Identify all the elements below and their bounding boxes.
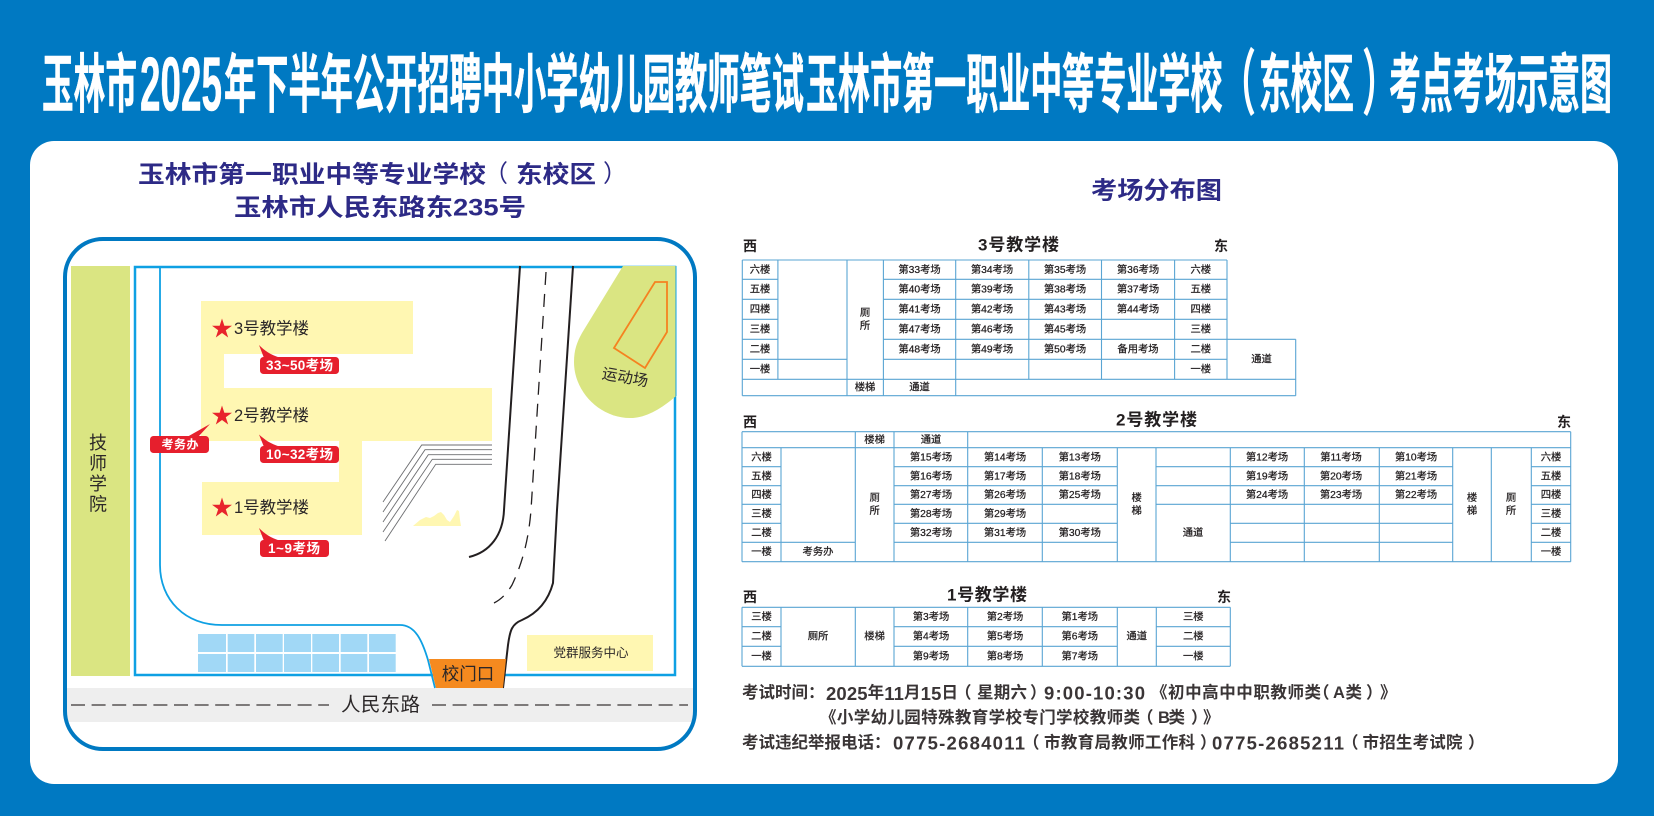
heading: school name and address: ）	[603, 160, 627, 188]
exam time line 2: 》	[1203, 708, 1220, 727]
building 3 labels: 三楼	[1191, 322, 1211, 335]
building 1 labels: 第5考场	[987, 630, 1023, 643]
building 3 labels: 六楼	[1191, 263, 1211, 276]
building 1 labels: 三楼	[751, 610, 772, 623]
building 2 labels: 四楼	[1541, 488, 1561, 501]
building 2 labels: 五楼	[1541, 469, 1561, 482]
heading: school name and address: 玉林市人民东路东235号	[234, 194, 526, 222]
report phones line: （	[1023, 733, 1040, 752]
exam time line 1	[742, 682, 1396, 704]
building 3 labels: 第42考场	[971, 302, 1013, 315]
building 3 labels: 第49考场	[971, 342, 1013, 355]
building 2 labels: 三楼	[1541, 507, 1561, 520]
building 3 labels: 所	[860, 320, 870, 332]
heading: exam room distribution: 考场分布图	[1091, 178, 1222, 204]
building 3 labels: 四楼	[750, 302, 770, 315]
table: building 1	[742, 584, 1231, 666]
report phones line: （	[1342, 733, 1358, 752]
building 3 labels: 一楼	[1191, 362, 1211, 375]
building 1 header: 西	[743, 589, 757, 605]
building 1 labels: 第6考场	[1061, 630, 1098, 643]
building 1 labels: 第1考场	[1061, 610, 1098, 623]
building 1 labels: 第3考场	[913, 610, 949, 623]
building 1 labels	[751, 610, 1204, 662]
panel: white content area	[30, 141, 1618, 784]
sports field: 运动场	[601, 365, 650, 390]
building 2 label: 2号教学楼	[234, 406, 309, 425]
building 2 labels: 第16考场	[910, 469, 952, 482]
building 3 labels: 通道	[909, 381, 930, 394]
campus inner road edge	[160, 267, 435, 688]
table: building 3	[742, 234, 1296, 396]
building: technician college: 院	[89, 494, 107, 514]
map frame	[65, 239, 695, 749]
building 3 labels: 第43考场	[1044, 302, 1086, 315]
building: technician college: 学	[89, 474, 107, 494]
exam time line 1: ）	[1366, 683, 1382, 702]
building 2 labels: 二楼	[1541, 526, 1561, 539]
building 3 labels: 二楼	[1191, 342, 1211, 355]
building 3 labels: 通道	[1251, 352, 1272, 365]
building 1 labels: 第4考场	[913, 630, 949, 643]
heading: school name and address	[138, 160, 627, 222]
building 2 labels: 第10考场	[1395, 450, 1437, 463]
building 3 labels: 第41考场	[898, 302, 941, 315]
exam time line 1: ）	[1030, 683, 1046, 702]
building 1 labels: 三楼	[1183, 610, 1204, 623]
building 3 labels: 二楼	[750, 342, 770, 355]
building 3 header: 东	[1214, 238, 1228, 254]
title: 玉林市第一职业中等专业学校	[806, 49, 1222, 121]
building 2 labels: 通道	[1183, 526, 1203, 539]
exam time line 1: （	[1313, 683, 1330, 702]
title: 2025	[140, 42, 222, 128]
text block: exam time and report phones	[742, 682, 1484, 754]
exam time line 2: （	[1137, 708, 1154, 727]
exam time line 1: （	[955, 683, 972, 702]
building 2 labels: 第15考场	[910, 450, 952, 463]
building 2 labels: 第24考场	[1246, 488, 1288, 501]
building 2 labels: 第20考场	[1320, 469, 1362, 482]
building 2 labels: 第13考场	[1059, 450, 1101, 463]
building 2 labels: 所	[1506, 505, 1516, 517]
party service centre	[527, 635, 653, 671]
building 2 labels: 楼	[1131, 491, 1142, 504]
building 2 labels: 所	[869, 505, 880, 517]
building 1 labels: 第2考场	[987, 610, 1023, 623]
heading: school name and address: 玉林市第一职业中等专业学校	[138, 162, 486, 188]
report phones line: 市教育局教师工作科	[1044, 732, 1196, 752]
building 3 labels: 备用考场	[1117, 342, 1159, 355]
hatched pavement lines	[383, 445, 492, 541]
title	[42, 42, 1612, 128]
building 2 labels: 第30考场	[1059, 526, 1101, 539]
report phones line: 0775-2685211	[1212, 732, 1344, 754]
building 2 labels: 第14考场	[984, 450, 1026, 463]
heading: school name and address: （	[484, 160, 508, 188]
building 2 labels: 第17考场	[984, 469, 1026, 482]
callout: exam office: 考务办	[162, 436, 198, 452]
building 2 labels: 第32考场	[910, 526, 952, 539]
callout: rooms 1-9	[259, 528, 329, 557]
building 1 header: 东	[1217, 589, 1231, 605]
school gate	[429, 659, 506, 688]
exam time line 1: 9:00-10:30	[1044, 682, 1145, 704]
exam time line 1: A类	[1333, 683, 1362, 702]
building 2 labels: 考务办	[803, 545, 833, 558]
heading: school name and address: 东校区	[516, 162, 596, 188]
building 3 labels: 第35考场	[1044, 263, 1086, 276]
title: 东校区	[1259, 49, 1354, 121]
report phones line: ）	[1468, 733, 1484, 752]
report phones line: 市招生考试院	[1362, 732, 1463, 752]
building 3 labels: 五楼	[1191, 282, 1211, 295]
building 3 labels: 第45考场	[1044, 322, 1086, 335]
building 3 labels: 第46考场	[971, 322, 1013, 335]
building 3 labels: 第34考场	[971, 263, 1013, 276]
building 2 labels: 梯	[1467, 504, 1477, 517]
building 3 labels: 第37考场	[1117, 282, 1159, 295]
title: 年下半年公开招聘中小学幼儿园教师笔试	[224, 49, 804, 121]
building: technician college: 技	[89, 433, 107, 453]
building 2 labels: 六楼	[1541, 450, 1561, 463]
building 3 labels: 第47考场	[898, 322, 941, 335]
panel: campus map	[65, 239, 695, 749]
building 2 labels: 第21考场	[1395, 469, 1437, 482]
campus boundary	[135, 267, 675, 675]
building 2 header: 2号教学楼	[1116, 410, 1197, 430]
building 2 labels: 五楼	[751, 469, 772, 482]
title: （	[1220, 45, 1256, 125]
building 3 labels	[750, 263, 1272, 394]
callout: rooms 33-50	[259, 345, 339, 374]
building 2 labels: 第18考场	[1059, 469, 1101, 482]
building 1 header	[743, 584, 1231, 605]
exam time line 1: 《初中高中中职教师类	[1151, 682, 1322, 702]
table: building 2	[742, 410, 1571, 562]
sports field	[574, 266, 676, 418]
building 1 header: 1号教学楼	[947, 584, 1027, 604]
building 2 labels: 六楼	[751, 450, 772, 463]
building 2 labels: 第23考场	[1320, 488, 1362, 501]
small yellow landscaping	[413, 510, 461, 526]
building 3 labels: 一楼	[750, 362, 770, 375]
building 2 labels: 通道	[921, 433, 941, 446]
building: teaching building footprints	[201, 301, 492, 535]
building 2 labels: 厕	[1506, 492, 1516, 504]
building 3 header	[743, 234, 1228, 254]
building 3 labels: 四楼	[1191, 302, 1211, 315]
building 2 labels: 四楼	[751, 488, 772, 501]
road: Renmin East Road band: 人民东路	[341, 694, 420, 716]
building 3 labels: 第38考场	[1044, 282, 1086, 295]
callout: rooms 10-32: 10~32考场	[266, 447, 333, 462]
callout: rooms 33-50: 33~50考场	[266, 358, 333, 373]
party service centre: 党群服务中心	[553, 645, 629, 660]
exam time line 1: 星期六	[977, 683, 1027, 702]
building 1 grid	[742, 607, 1230, 666]
building 2 labels: 厕	[869, 492, 880, 504]
building 3 labels: 厕	[860, 307, 870, 319]
road: Renmin East Road band	[67, 688, 693, 722]
building 2 labels: 二楼	[751, 526, 772, 539]
building 3 labels: 六楼	[750, 263, 770, 276]
building 2 labels: 楼梯	[864, 433, 885, 446]
building 3 header: 西	[743, 238, 757, 254]
report phones line: 考试违纪举报电话：	[742, 732, 890, 752]
building 2 labels: 楼	[1467, 491, 1477, 504]
callout: exam office	[150, 424, 210, 453]
exam time line 1: 2025年11月15日	[826, 682, 958, 704]
building 3 labels: 第36考场	[1117, 263, 1159, 276]
building 1 labels: 第9考场	[913, 649, 949, 662]
exam time line 2: 《小学幼儿园特殊教育学校专门学校教师类	[820, 707, 1140, 727]
building 2 header	[743, 410, 1571, 430]
school gate: 校门口	[442, 664, 494, 684]
building 1 labels: 一楼	[1183, 649, 1204, 662]
building 1 labels: 楼梯	[864, 630, 885, 643]
building 3 label: 3号教学楼	[234, 319, 309, 338]
title: ）	[1362, 45, 1398, 125]
report phones line	[742, 732, 1484, 754]
building 3 labels: 五楼	[750, 282, 770, 295]
campus main road	[469, 266, 573, 688]
building 1 labels: 第8考场	[987, 649, 1023, 662]
building 2 labels: 第28考场	[910, 507, 952, 520]
parking grid	[198, 634, 396, 672]
callout: rooms 1-9: 1~9考场	[268, 541, 320, 556]
building 2 header: 东	[1557, 414, 1571, 430]
building 2 labels: 三楼	[751, 507, 772, 520]
building 1 labels: 二楼	[1183, 630, 1204, 643]
exam time line 2: B类	[1158, 708, 1186, 727]
callout: rooms 10-32	[259, 434, 339, 463]
building: technician college	[71, 266, 130, 676]
building 2 labels: 第11考场	[1320, 450, 1362, 463]
building 3 labels: 第33考场	[898, 263, 941, 276]
building 3 labels: 第50考场	[1044, 342, 1086, 355]
building 1 labels: 厕所	[808, 631, 828, 643]
building 2 labels: 第26考场	[984, 488, 1026, 501]
building 2 labels: 第25考场	[1059, 488, 1101, 501]
building 2 labels	[751, 433, 1561, 558]
title: 玉林市	[42, 49, 137, 121]
building 2 labels: 第31考场	[984, 526, 1026, 539]
building 3 labels: 楼梯	[855, 381, 875, 394]
building 2 labels: 第27考场	[910, 488, 952, 501]
building 3 labels: 三楼	[750, 322, 770, 335]
report phones line: ）	[1200, 733, 1216, 752]
building 2 labels: 梯	[1131, 504, 1142, 517]
building 3 labels: 第48考场	[898, 342, 941, 355]
building 2 labels: 第12考场	[1246, 450, 1288, 463]
exam time line 1: 》	[1380, 683, 1396, 702]
building 2 labels: 第19考场	[1246, 469, 1288, 482]
building 1 labels: 通道	[1127, 630, 1147, 643]
building 3 labels: 第44考场	[1117, 302, 1159, 315]
building 2 labels: 第29考场	[984, 507, 1026, 520]
building 1 labels: 一楼	[751, 649, 772, 662]
exam time line 1: 考试时间：	[742, 683, 824, 702]
building 2 labels: 第22考场	[1395, 488, 1437, 501]
building 3 grid	[742, 260, 1296, 396]
building 1 labels: 二楼	[751, 630, 772, 643]
building: technician college: 师	[89, 454, 107, 474]
building 2 grid	[742, 432, 1571, 562]
exam time line 2: ）	[1191, 708, 1208, 727]
building 3 labels: 第39考场	[971, 282, 1013, 295]
building 3 labels: 第40考场	[898, 282, 941, 295]
building 1 labels: 第7考场	[1061, 649, 1098, 662]
building 1 label: 1号教学楼	[234, 498, 309, 517]
building 3 header: 3号教学楼	[978, 234, 1059, 254]
report phones line: 0775-2684011	[893, 732, 1025, 754]
building 2 labels: 一楼	[1541, 545, 1561, 558]
building 2 header: 西	[743, 414, 757, 430]
building 2 labels: 一楼	[751, 545, 772, 558]
